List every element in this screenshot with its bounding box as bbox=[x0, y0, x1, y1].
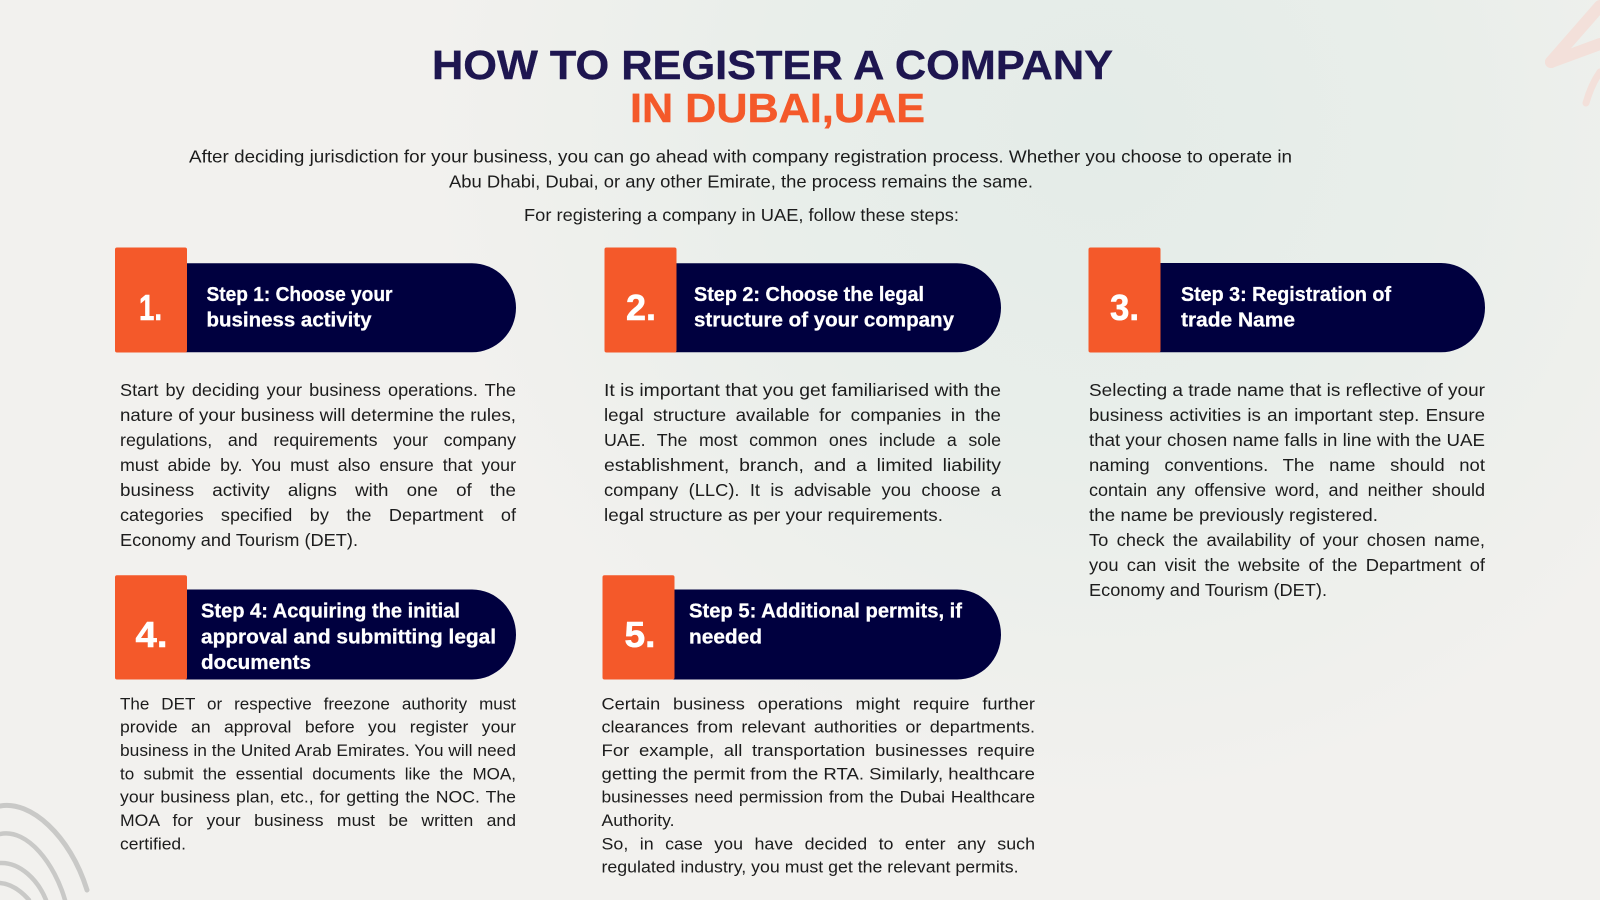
panel: step 3 bbox=[1088, 248, 1485, 600]
step 2 banner: Step 2: Choose the legal bbox=[694, 283, 924, 306]
step 3 banner: trade Name bbox=[1181, 308, 1295, 332]
step 1 body text: nature of your business will determine the rules, bbox=[120, 405, 516, 425]
step 4 body text: business in the United Arab Emirates. You will need bbox=[120, 742, 516, 760]
panel: step 4 bbox=[115, 575, 517, 853]
step 5 body text: regulated industry, you must get the relevant permits. bbox=[602, 859, 1018, 877]
intro text: For registering a company in UAE, follow these steps: bbox=[524, 205, 959, 225]
step 2 body text: legal structure as per your requirements. bbox=[604, 505, 943, 525]
step 3 banner bbox=[1088, 248, 1485, 352]
step 4 body text: The DET or respective freezone authority must bbox=[120, 695, 516, 713]
step 1 banner: business activity bbox=[206, 308, 372, 332]
intro text bbox=[189, 146, 1292, 225]
step 5 body text: businesses need permission from the Dubai Healthcare bbox=[602, 789, 1035, 807]
step 4 body text: your business plan, etc., for getting the NOC. The bbox=[120, 789, 516, 807]
panel: step 1 bbox=[115, 248, 516, 550]
step 4 body text: MOA for your business must be written and bbox=[120, 812, 516, 830]
step 3 body text: you can visit the website of the Department of bbox=[1089, 555, 1485, 575]
step 2 banner: structure of your company bbox=[694, 308, 955, 332]
step 3 body text: Economy and Tourism (DET). bbox=[1089, 580, 1327, 600]
title bbox=[432, 42, 1113, 131]
step 2 body text: establishment, branch, and a limited liability bbox=[604, 455, 1001, 475]
step 5 body text: Certain business operations might require further bbox=[602, 695, 1036, 713]
step 3 body text: business activities is an important step. Ensure bbox=[1089, 405, 1485, 425]
title: HOW TO REGISTER A COMPANY bbox=[432, 42, 1113, 88]
step 5 body text: clearances from relevant authorities or departments. bbox=[602, 719, 1035, 737]
step 2 banner: 2. bbox=[626, 287, 656, 328]
step 5 body text: getting the permit from the RTA. Similarly, healthcare bbox=[602, 765, 1035, 783]
step 3 body text: that your chosen name falls in line with the UAE bbox=[1089, 430, 1485, 450]
step 3 body text: Selecting a trade name that is reflective of your bbox=[1089, 380, 1485, 400]
panel: step 5 bbox=[602, 575, 1036, 877]
step 3 body text bbox=[1089, 380, 1485, 600]
panel: step 2 bbox=[604, 248, 1001, 525]
step 1 body text: Start by deciding your business operations. The bbox=[120, 380, 516, 400]
step 1 banner: 1. bbox=[139, 287, 162, 328]
step 1 body text: business activity aligns with one of the bbox=[120, 480, 516, 500]
step 4 body text: provide an approval before you register your bbox=[120, 719, 517, 737]
step 2 body text: company (LLC). It is advisable you choose a bbox=[604, 480, 1001, 500]
decoration: pink brush stroke bbox=[1551, 6, 1600, 103]
step 3 banner: 3. bbox=[1110, 287, 1139, 328]
step 2 body text: UAE. The most common ones include a sole bbox=[604, 430, 1001, 450]
title: IN DUBAI,UAE bbox=[630, 85, 925, 131]
step 4 body text: certified. bbox=[120, 835, 186, 853]
step 5 body text bbox=[602, 695, 1036, 877]
step 5 banner: 5. bbox=[624, 614, 656, 655]
step 5 banner: needed bbox=[689, 625, 762, 648]
step 2 body text: legal structure available for companies in the bbox=[604, 405, 1001, 425]
step 3 body text: the name be previously registered. bbox=[1089, 505, 1378, 525]
step 4 body text bbox=[120, 695, 517, 853]
step 2 banner bbox=[604, 248, 1001, 352]
step 1 body text: must abide by. You must also ensure that your bbox=[120, 455, 516, 475]
step 4 banner: approval and submitting legal bbox=[201, 625, 496, 648]
step 3 body text: To check the availability of your chosen name, bbox=[1089, 530, 1485, 550]
step 2 body text bbox=[604, 380, 1001, 525]
step 1 banner: Step 1: Choose your bbox=[206, 283, 393, 306]
decoration: fingerprint arcs bbox=[0, 805, 87, 900]
step 1 body text: categories specified by the Department of bbox=[120, 505, 516, 525]
step 1 body text: regulations, and requirements your company bbox=[120, 430, 516, 450]
step 4 body text: to submit the essential documents like the MOA, bbox=[120, 765, 516, 783]
step 2 body text: It is important that you get familiarised with the bbox=[604, 380, 1001, 400]
intro text: Abu Dhabi, Dubai, or any other Emirate, the process remains the same. bbox=[449, 172, 1033, 192]
step 5 banner bbox=[602, 575, 1001, 680]
step 4 banner: 4. bbox=[136, 614, 168, 655]
step 1 banner bbox=[115, 248, 516, 352]
step 5 banner: Step 5: Additional permits, if bbox=[689, 600, 962, 622]
step 3 banner: Step 3: Registration of bbox=[1181, 283, 1391, 306]
step 3 body text: naming conventions. The name should not bbox=[1089, 455, 1485, 475]
step 5 body text: So, in case you have decided to enter any such bbox=[602, 835, 1035, 853]
step 4 banner: documents bbox=[201, 651, 311, 674]
step 4 banner: Step 4: Acquiring the initial bbox=[201, 600, 460, 622]
step 1 body text: Economy and Tourism (DET). bbox=[120, 530, 358, 550]
step 5 body text: For example, all transportation businesses require bbox=[602, 742, 1035, 760]
step 4 banner bbox=[115, 575, 516, 680]
step 3 body text: contain any offensive word, and neither should bbox=[1089, 480, 1485, 500]
step 1 body text bbox=[120, 380, 516, 550]
intro text: After deciding jurisdiction for your business, you can go ahead with company registration process. Whether you choose to operate in bbox=[189, 146, 1292, 166]
step 5 body text: Authority. bbox=[602, 812, 674, 830]
